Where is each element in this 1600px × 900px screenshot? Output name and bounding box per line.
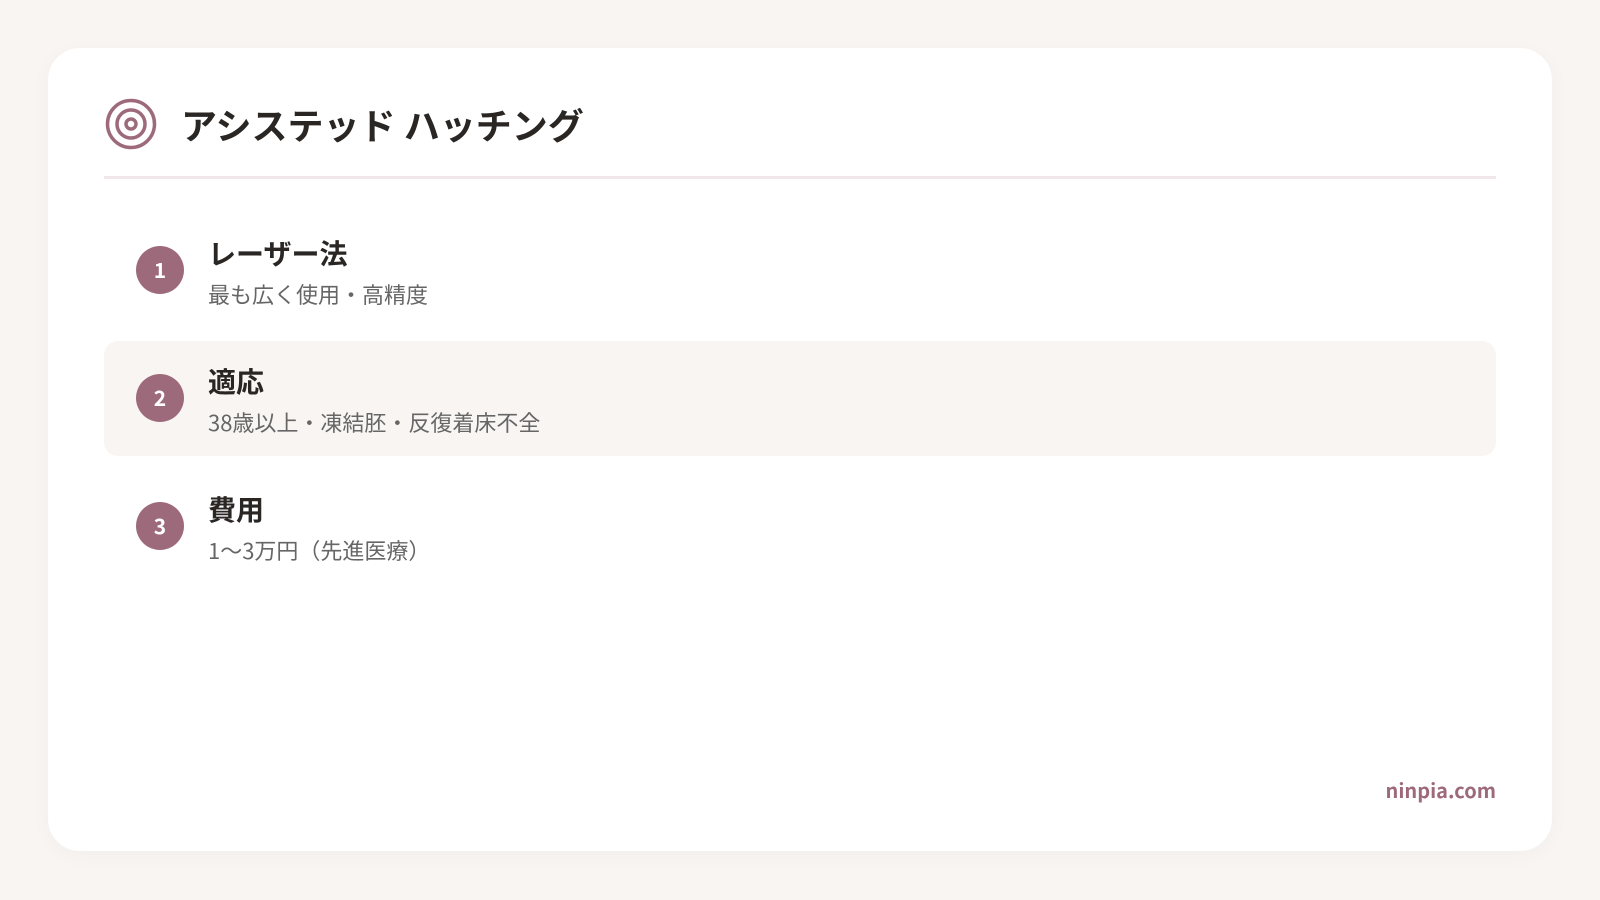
number 1: 1: [154, 254, 166, 284]
item title: 費用: [208, 489, 264, 529]
footer: ninpia.com: [1386, 775, 1496, 804]
number 3: 3: [154, 510, 166, 540]
number 2: [136, 374, 184, 422]
number 1: [136, 246, 184, 294]
title: アシステッド ハッチング: [181, 98, 584, 150]
item 1: [136, 233, 428, 310]
icon: target: [106, 98, 156, 150]
item title: 適応: [208, 361, 264, 401]
item title: レーザー法: [208, 233, 347, 273]
item text: 1〜3万円（先進医療）: [208, 534, 430, 566]
number 2: 2: [154, 382, 166, 412]
number 3: [136, 502, 184, 550]
item 2: [104, 341, 1496, 456]
item text: 最も広く使用・高精度: [208, 278, 428, 310]
item 3: [136, 489, 430, 566]
item text: 38歳以上・凍結胚・反復着床不全: [208, 406, 540, 438]
